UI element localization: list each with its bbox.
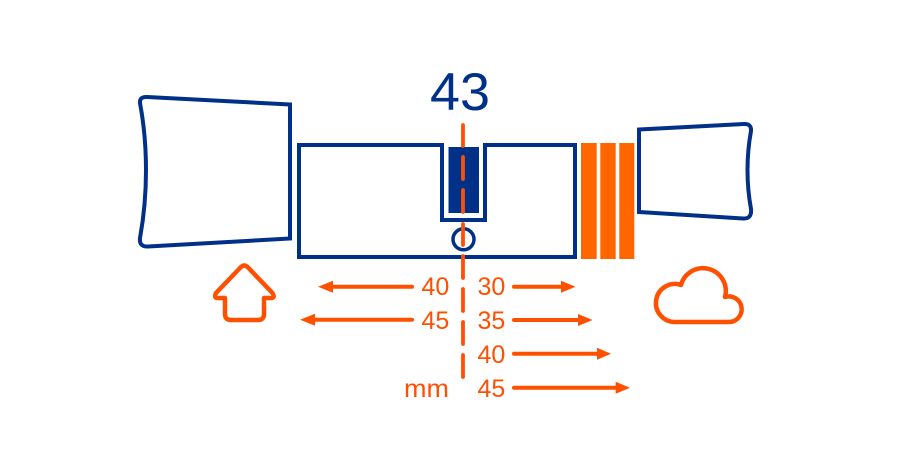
right thumb knob — [639, 124, 751, 219]
orange extension bars — [581, 143, 634, 259]
left length labels: 40 — [422, 273, 449, 301]
icon: cloud (outside) — [656, 268, 742, 322]
left length labels: 45 — [422, 307, 449, 335]
right length labels — [478, 273, 505, 403]
icon: house (inside) — [215, 266, 274, 320]
screw hole circle — [453, 229, 474, 250]
cam block — [448, 147, 479, 213]
right length labels: 45 — [478, 375, 505, 403]
left arrows — [300, 281, 412, 326]
right length labels: 40 — [478, 341, 505, 369]
left length labels — [404, 273, 449, 403]
right length labels: 30 — [478, 273, 505, 301]
heading: 43 mm centre dimension: 43 — [430, 63, 490, 122]
dashed centre line — [461, 125, 465, 377]
right length labels: 35 — [478, 307, 505, 335]
cylinder body with cam slot — [299, 145, 575, 257]
left length labels: mm — [404, 375, 449, 403]
right arrows — [514, 281, 630, 394]
left thumb knob — [140, 97, 290, 247]
